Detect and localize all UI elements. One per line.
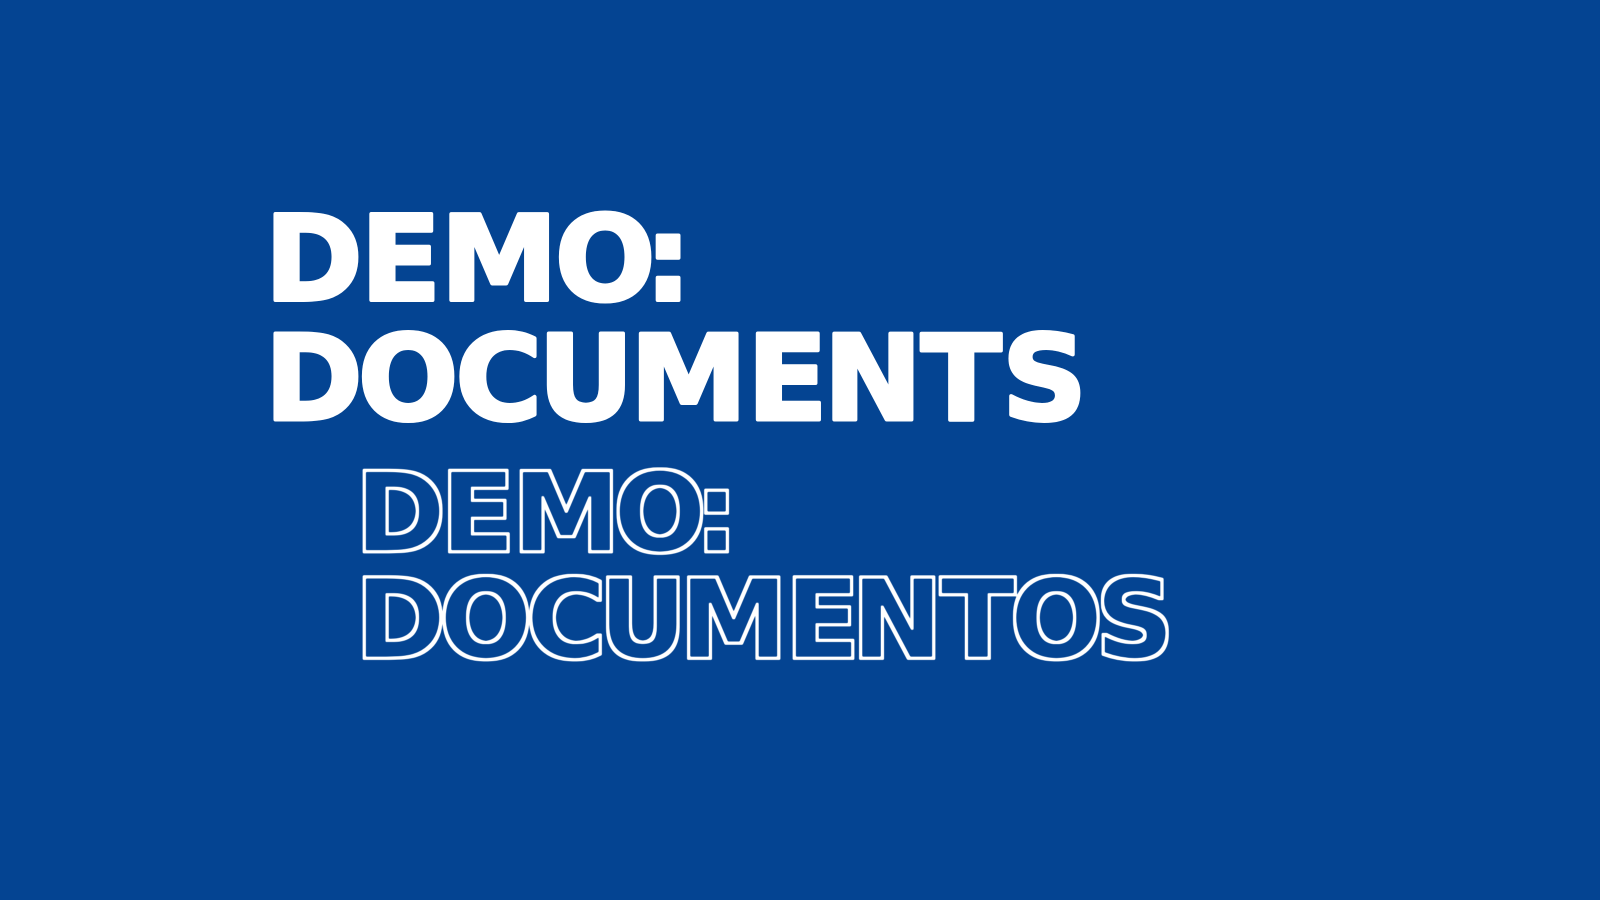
outlined subheading line: DOCUMENTOS: DOCUMENTOS bbox=[356, 558, 1174, 683]
heading line: DEMO:: DEMO: bbox=[265, 190, 692, 328]
outlined subheading line: DEMO:: DEMO: bbox=[356, 452, 738, 576]
heading line: DOCUMENTS: DOCUMENTS bbox=[265, 310, 1087, 448]
